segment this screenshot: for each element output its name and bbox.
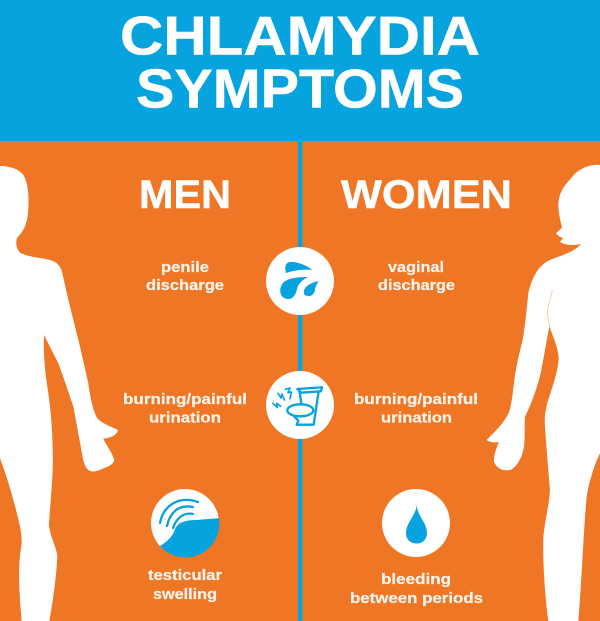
label: women burning urination: urination <box>381 410 452 426</box>
heading: women: WOMEN <box>341 173 512 217</box>
silhouette: woman <box>487 165 600 621</box>
label: women burning urination: burning/painful <box>354 391 478 408</box>
header band <box>0 0 600 141</box>
label: bleeding between periods: bleeding <box>381 571 451 588</box>
icon: blood drop <box>382 489 450 557</box>
label: penile discharge: discharge <box>146 277 224 294</box>
icon: toilet <box>266 371 334 439</box>
title <box>120 4 480 120</box>
icon: discharge drops <box>266 247 334 315</box>
label: vaginal discharge: discharge <box>378 277 455 294</box>
label: penile discharge <box>146 259 224 294</box>
silhouette: man <box>0 166 118 621</box>
label: bleeding between periods <box>350 571 483 607</box>
label: testicular swelling: swelling <box>153 586 217 603</box>
label: women burning urination <box>354 391 478 426</box>
title: SYMPTOMS <box>136 58 464 120</box>
title: CHLAMYDIA <box>120 4 480 66</box>
label: vaginal discharge: vaginal <box>388 259 444 276</box>
heading: men: MEN <box>139 173 231 217</box>
label: vaginal discharge <box>378 259 455 294</box>
label: testicular swelling <box>148 567 222 603</box>
label: penile discharge: penile <box>161 259 209 276</box>
label: men burning urination: burning/painful <box>123 391 247 408</box>
icon: testicular swelling <box>151 489 219 557</box>
label: men burning urination <box>123 391 247 426</box>
label: testicular swelling: testicular <box>148 567 222 584</box>
label: bleeding between periods: between periods <box>350 590 483 607</box>
label: men burning urination: urination <box>149 410 221 426</box>
